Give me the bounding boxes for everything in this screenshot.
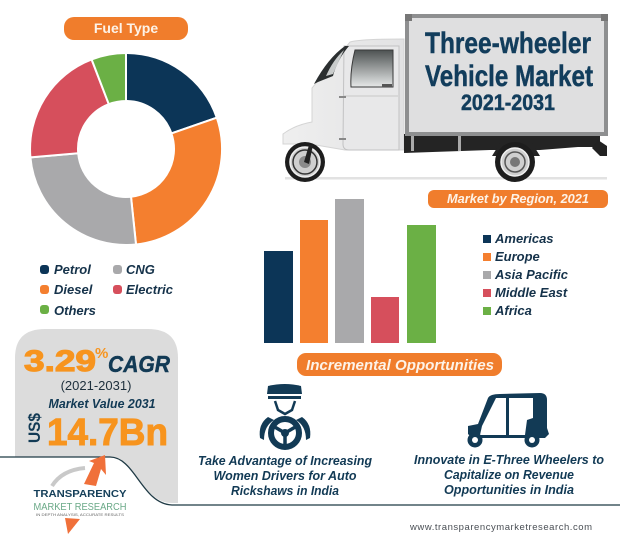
heading: Market by Region xyxy=(428,190,608,208)
legend: fuel type: CNG xyxy=(126,262,155,277)
legend: fuel type xyxy=(40,262,174,318)
heading: Fuel Type: Fuel Type xyxy=(94,20,158,36)
callout: CAGR: CAGR xyxy=(108,351,170,377)
heading: Fuel Type xyxy=(64,17,188,40)
panel: CAGR and market value background xyxy=(0,329,620,540)
text: women drivers opportunity: Take Advantage of Increasing xyxy=(198,453,372,468)
callout: market value: Market Value 2031 xyxy=(48,396,156,411)
logo: Transparency Market Research: TRANSPARENCY xyxy=(34,488,126,500)
legend: fuel type: Petrol xyxy=(54,262,91,277)
text: e-three wheelers opportunity: Capitalize on Revenue xyxy=(444,467,574,482)
text: women drivers opportunity: Women Drivers for Auto xyxy=(214,468,357,483)
legend: fuel type: Electric xyxy=(126,282,174,297)
text: e-three wheelers opportunity: Opportunities in India xyxy=(444,482,574,497)
legend: regions xyxy=(483,231,569,318)
title: Three-wheeler Vehicle Market 2021-2031: 2021-2031 xyxy=(461,90,555,115)
title: Three-wheeler Vehicle Market 2021-2031 xyxy=(425,27,593,115)
callout: CAGR xyxy=(24,345,170,393)
heading: Incremental Opportunities xyxy=(297,353,502,376)
legend: regions: Asia Pacific xyxy=(494,267,569,282)
icon: auto rickshaw xyxy=(468,393,549,448)
callout: market value: US$ xyxy=(25,413,44,443)
illustration: three-wheeler truck xyxy=(283,14,608,182)
callout: market value: 14.7Bn xyxy=(47,412,168,454)
bar chart: market by region xyxy=(264,199,436,343)
text: e-three wheelers opportunity: Innovate in E-Three Wheelers to xyxy=(414,452,604,467)
text: women drivers opportunity xyxy=(198,453,372,498)
icon: woman driver with steering wheel xyxy=(260,384,310,447)
text: e-three wheelers opportunity xyxy=(414,452,604,497)
legend: regions: Europe xyxy=(495,249,540,264)
logo: Transparency Market Research: IN DEPTH ANALYSIS, ACCURATE RESULTS xyxy=(36,513,125,517)
callout: CAGR: 3.29 xyxy=(24,345,96,378)
donut chart: fuel type xyxy=(30,53,222,245)
text: women drivers opportunity: Rickshaws in India xyxy=(231,483,339,498)
legend: regions: Americas xyxy=(494,231,554,246)
website URL: www.transparencymarketresearch.com xyxy=(409,522,592,533)
heading: Market by Region: Market by Region, 2021 xyxy=(447,191,589,206)
legend: regions: Middle East xyxy=(495,285,568,300)
legend: fuel type: Diesel xyxy=(54,282,93,297)
callout: CAGR: % xyxy=(95,345,108,362)
heading: Incremental Opportunities: Incremental Opportunities xyxy=(306,357,494,374)
legend: regions: Africa xyxy=(494,303,532,318)
logo: Transparency Market Research: MARKET RESEARCH xyxy=(34,502,126,513)
logo: Transparency Market Research xyxy=(34,455,126,534)
callout: market value xyxy=(25,396,168,454)
legend: fuel type: Others xyxy=(54,303,96,318)
callout: CAGR: (2021-2031) xyxy=(61,378,131,393)
